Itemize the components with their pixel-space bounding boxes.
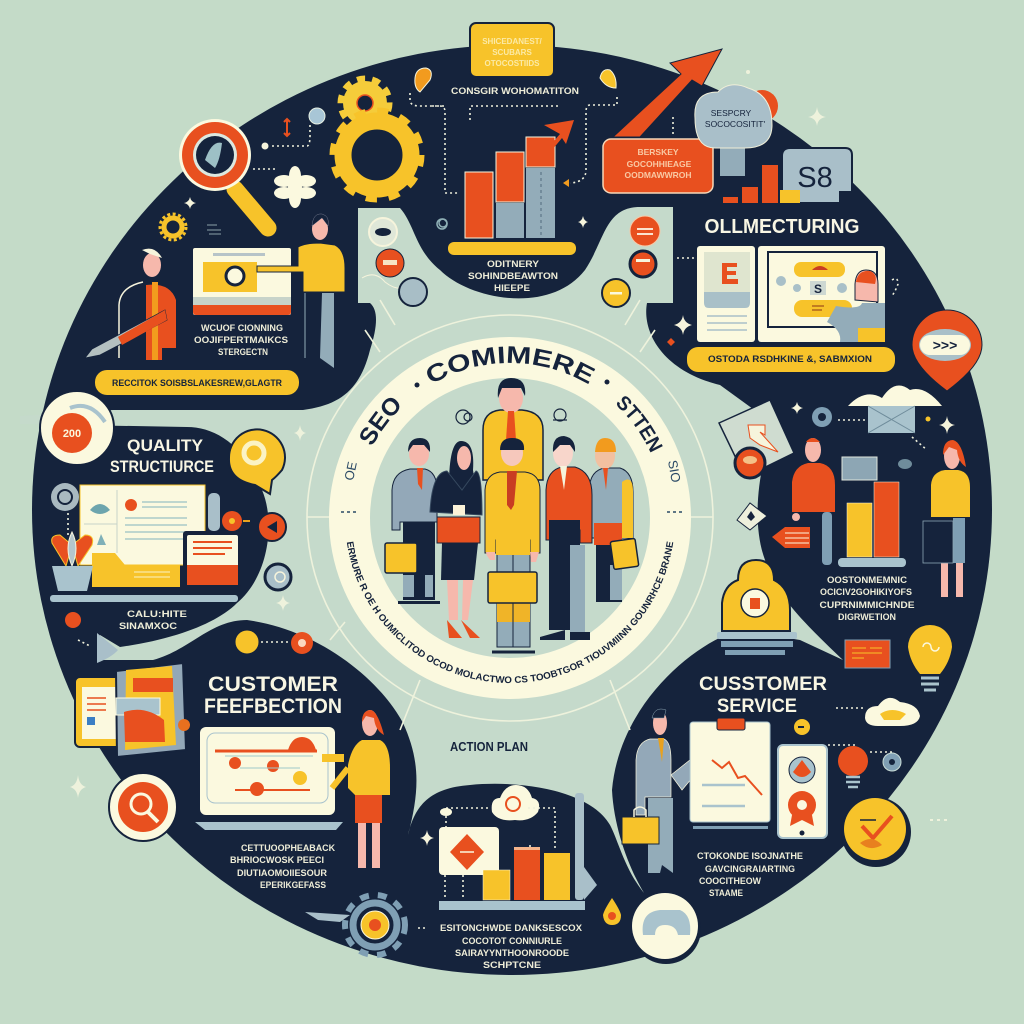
bar chart — [448, 120, 576, 255]
panel: left quality structure — [40, 391, 291, 663]
caption: STERGECTN — [218, 347, 268, 358]
caption: CALU:HITE — [127, 609, 187, 620]
caption — [230, 843, 335, 891]
big arrow — [613, 49, 722, 137]
caption: CETTUOOPHEABACK — [241, 843, 335, 854]
circular title: STTEN — [617, 396, 663, 452]
panel: top-left research — [85, 68, 460, 395]
caption: EPERIKGEFASS — [260, 880, 326, 891]
icon: gears — [160, 79, 420, 240]
person: man in orange — [792, 438, 835, 565]
devices — [75, 663, 190, 757]
document — [80, 485, 220, 565]
person: fifth person — [589, 438, 639, 602]
person: presenter — [622, 709, 712, 873]
heading: SERVICE — [717, 696, 797, 717]
person: presenter — [257, 214, 345, 368]
person: woman in yellow — [923, 440, 970, 597]
yellow pill label: RECCITOK SOISBSLAKESREW,GLAGTR — [112, 378, 282, 389]
small icons — [51, 483, 291, 663]
connector details — [184, 68, 460, 234]
caption: STAAME — [709, 888, 743, 899]
heading — [699, 674, 827, 717]
orange label: GOCOHHIEAGE — [627, 159, 692, 169]
business team — [385, 378, 639, 652]
icon: cloud — [440, 785, 555, 900]
small emblem icons — [456, 409, 567, 424]
control buttons — [362, 218, 447, 306]
icon: check badge — [841, 797, 911, 867]
diamond card — [439, 827, 499, 875]
small bars with S8 card: S8 — [797, 162, 833, 194]
heading: CONSGIR WOHOMATITON — [451, 86, 579, 97]
small icons — [794, 698, 920, 787]
clipboard with line chart — [690, 718, 770, 829]
decorative sparkles — [70, 70, 947, 820]
caption — [440, 923, 583, 971]
circular title: SEO — [360, 398, 400, 444]
icon: orange screen — [845, 640, 890, 668]
heading: STRUCTIURCE — [110, 457, 214, 476]
panel: lower right customer service — [622, 560, 952, 964]
icon: magnifier badge — [109, 773, 177, 841]
monitor with person — [758, 246, 885, 342]
side document — [697, 246, 755, 342]
caption: COOCITHEOW — [699, 876, 761, 887]
details — [667, 258, 898, 346]
circular title: COMIMERE — [427, 346, 596, 384]
circular title — [341, 346, 684, 684]
light interior channels — [20, 207, 843, 893]
person: left man — [385, 438, 440, 604]
tilted card — [719, 400, 810, 548]
person: back man — [483, 378, 543, 480]
icon: magnifier — [179, 119, 268, 228]
caption: GAVCINGRAIARTING — [705, 864, 795, 875]
panel: lower-left customer feedback — [75, 630, 405, 955]
caption: SINAMXOC — [119, 621, 177, 632]
cloud sign: SESPCRY — [711, 108, 752, 118]
caption: BHRIOCWOSK PEECI — [230, 855, 324, 866]
heading: CUSSTOMER — [699, 674, 827, 695]
orange label: OODMAWWROH — [624, 170, 692, 180]
heading: FEEFBECTION — [204, 695, 342, 718]
coins — [235, 630, 313, 654]
icon: speech bubble — [229, 429, 285, 494]
caption: CTOKONDE ISOJNATHE — [697, 851, 803, 862]
icon: location badge — [912, 310, 982, 391]
panel: top centre growth chart — [432, 23, 617, 294]
icon: flower — [274, 166, 316, 208]
icon: location badge: >>> — [933, 337, 957, 353]
folder — [92, 553, 180, 587]
icon: plant — [52, 532, 93, 591]
shelf — [50, 595, 238, 602]
central hub — [306, 300, 714, 730]
yellow pill label — [687, 347, 895, 372]
person: woman with skirt — [332, 710, 390, 868]
chart card — [193, 248, 291, 315]
person: orange jacket man — [540, 436, 592, 640]
caption — [820, 575, 914, 623]
laptop and bars — [838, 457, 912, 567]
monitor with person: S — [814, 282, 822, 296]
small bars with S8 card — [723, 148, 852, 203]
yellow note: OTOCOSTIIDS — [485, 59, 540, 68]
person: man with pen — [85, 249, 176, 360]
panel: bottom action plan — [418, 739, 621, 971]
phone with badge — [778, 745, 827, 838]
icon: gear with jet — [305, 895, 405, 955]
orange label: BERSKEY — [637, 147, 679, 157]
icon: 200 badge — [40, 391, 114, 465]
caption: COCOTOT CONNIURLE — [462, 936, 562, 947]
icon: round badge — [631, 893, 701, 964]
heading: ACTION PLAN — [450, 739, 528, 754]
heading — [204, 673, 342, 718]
panel: right analytics — [719, 386, 970, 623]
bar chart — [418, 793, 621, 928]
caption: ESITONCHWDE DANKSESCOX — [440, 923, 583, 934]
caption — [194, 323, 288, 358]
circular title: ERMURE R OE H OUMICLITOD OCOD MOLACTWO CS TOOBTGOR TIOUVMIINN GOUNRHCE BRANE — [346, 542, 674, 684]
caption: SOHINDBEAWTON — [468, 271, 558, 282]
heading — [110, 436, 214, 476]
heading: CUSTOMER — [208, 673, 338, 696]
caption: OOSTONMEMNIC — [827, 575, 907, 586]
cloud sign: SOCOCOSITIT' — [705, 119, 765, 129]
panel: top-right ollmecturing — [602, 49, 982, 391]
icon: yellow bulb — [908, 625, 952, 690]
person: front man — [485, 438, 540, 652]
circular title: OE — [341, 460, 360, 482]
icon: 200 badge: 200 — [63, 428, 81, 440]
person: woman with orange case — [430, 441, 482, 638]
heading: OLLMECTURING — [704, 216, 860, 238]
circular title: SIO — [665, 459, 684, 484]
caption — [119, 609, 187, 632]
caption: WCUOF CIONNING — [201, 323, 283, 334]
icon: envelope and cloud — [791, 386, 955, 450]
caption — [697, 851, 803, 899]
yellow note: SCUBARS — [492, 48, 532, 57]
caption: OOJIFPERTMAIKCS — [194, 335, 288, 346]
yellow pill label: OSTODA RSDHKINE &, SABMXION — [708, 354, 872, 365]
caption: HIEEPE — [494, 283, 530, 294]
caption: CUPRNIMMICHNDE — [820, 600, 914, 611]
status buttons — [602, 216, 660, 307]
caption — [468, 259, 558, 294]
connectors — [432, 70, 617, 229]
orange card — [183, 531, 241, 588]
cloud sign — [673, 85, 778, 176]
caption: SAIRAYYNTHOONROODE — [455, 948, 569, 959]
icon: service hat — [717, 560, 797, 655]
yellow note: SHICEDANEST/ — [482, 37, 543, 46]
monitor with timeline — [195, 727, 344, 830]
caption: SCHPTCNE — [483, 960, 541, 971]
orange label — [603, 139, 713, 193]
caption: DIGRWETION — [838, 612, 896, 623]
caption: ODITNERY — [487, 259, 540, 270]
yellow note — [470, 23, 554, 77]
caption: OCICIV2GOHIKIYOFS — [820, 587, 912, 598]
heading: QUALITY — [127, 436, 204, 455]
yellow pill label — [95, 370, 299, 395]
caption: DIUTIAOMOIIESOUR — [237, 868, 327, 879]
